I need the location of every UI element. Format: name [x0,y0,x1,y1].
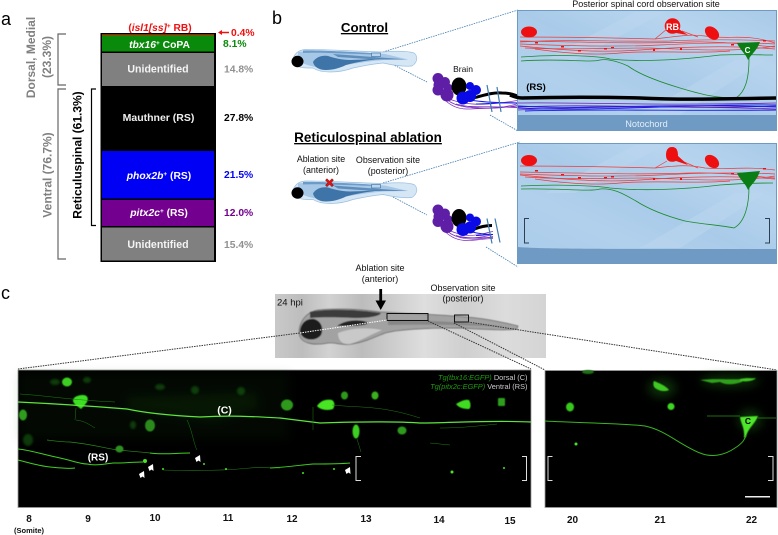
empty-axon brackets [524,218,770,243]
panel label a: a [1,9,12,29]
label: brain: Brain [453,64,473,74]
bracket: reticulospinal: Reticuluspinal (61.3%) [70,91,84,219]
photo: 24 hpi larva: 24 hpi [277,298,303,308]
zoom lines: panel b [383,10,520,267]
somite numbers: 12 [286,514,298,525]
panel label b: b [272,8,282,28]
micrograph: left, somites 8-15 [18,370,531,508]
neuron somata [19,378,505,452]
somite numbers: (Somite) [14,526,45,535]
panel label c: c [1,283,10,303]
label: ablation site in schematic [297,154,345,175]
diffuse background glow [18,372,290,440]
micrograph: left, somites 8-15: (RS) [88,452,108,464]
arrow: ablation site [376,289,386,310]
label: ablation site in schematic: Ablation site [297,154,345,164]
somite numbers: 9 [85,514,91,525]
segment: unidentified dorsal [102,53,214,86]
scale bar [745,496,770,498]
segment: tbx16 CoPA: CoPA [160,40,190,51]
Rohon-Beard neurons: RB [666,22,679,32]
bar title: isl1 RB: + [167,23,171,30]
zoom lines: panel c [18,320,777,370]
somite numbers: 11 [223,513,234,524]
segment: Mauthner [102,86,214,150]
axons [18,394,531,471]
bar outline [100,33,216,262]
percent labels: 0.4% [231,28,254,39]
legend: transgenic lines [430,373,528,391]
somite numbers: 8 [26,514,32,525]
notochord [518,115,776,130]
neuron somata [566,370,758,438]
puncta [574,442,578,446]
percent labels: 21.5% [224,170,253,181]
arrowheads [139,455,350,478]
segment: pitx2c [102,200,214,226]
diffuse glows [648,375,762,430]
percent labels: 15.4% [224,240,253,251]
segment: tbx16 CoPA [102,35,214,52]
brackets [548,456,773,480]
observation boxes [387,314,468,322]
somite numbers: 14 [433,515,445,526]
micrograph: right, somites 20-22 [545,370,777,508]
segment: phox2b: + [163,171,167,178]
segment: pitx2c: + [160,208,164,215]
Rohon-Beard neurons [520,18,775,54]
percent labels [223,28,254,251]
icon: red ablation cross [326,179,334,187]
CoPA neuron: C [745,46,751,55]
segment: phox2b: (RS) [167,171,191,182]
bracket: reticulospinal [70,89,96,226]
panel: ablated spinal cord [518,144,776,264]
segment: phox2b: phox2b [126,171,163,182]
segment: isl1 RB [102,34,214,35]
percent labels: 8.1% [223,39,246,50]
heading: reticulospinal ablation: Reticulospinal ablation [294,130,442,145]
diagram: ablated brain [432,204,500,244]
panel: control spinal cord [510,10,776,130]
axon labels: (C) [217,404,232,416]
label: ablation site in schematic: (anterior) [303,165,339,175]
puncta [143,459,505,474]
icon: control larval fish [292,49,417,72]
percent labels: 27.8% [224,113,253,124]
arrow: 0.4 percent [218,30,229,35]
icon: ablation larval fish [292,179,417,204]
bracket: dorsal medial [24,17,66,98]
percent labels: 14.8% [224,64,253,76]
larva body [299,309,518,345]
segment: Mauthner: Mauthner (RS) [123,112,194,124]
segment: phox2b [102,151,214,198]
segment: tbx16 CoPA: tbx16 [129,40,156,51]
label: observation site on photo: (posterior) [442,294,484,304]
label: observation site in schematic [356,155,420,176]
label: observation site on photo: Observation site [430,283,496,293]
bracket: ventral: Ventral (76.7%) [40,132,54,218]
label: observation site on photo [430,283,496,304]
label: ablation site on photo: Ablation site [355,263,405,273]
panel a: stacked bar of spinal neurons [100,33,216,262]
segment: pitx2c: pitx2c [129,208,160,219]
somite numbers: 13 [360,514,372,525]
diagram: control brain [432,73,520,112]
Rohon-Beard neurons [520,147,775,184]
somite numbers: 22 [746,515,757,526]
segment: unidentified dorsal: Unidentified [127,64,189,76]
CoPA axon [545,416,776,455]
CoPA neuron [521,171,773,228]
reticulospinal axons: (RS) [526,82,546,93]
bracket: dorsal medial: Dorsal, Medial [24,17,38,98]
brackets [356,456,526,480]
label: observation site in schematic: Observation site [356,155,420,165]
label: observation site in schematic: (posterior) [368,166,408,176]
heading: control: Control [341,20,388,35]
segment: tbx16 CoPA: + [156,40,160,47]
legend: transgenic lines: Tg(pitx2c:EGFP) Ventral (RS) [430,382,528,391]
notochord: Notochord [625,119,668,129]
photo: 24 hpi larva [275,294,546,358]
somite numbers: 10 [149,513,161,524]
bar title: isl1 RB: (isl1[ss] [128,23,167,34]
notochord [518,247,776,264]
percent labels: 12.0% [224,208,253,219]
reticulospinal axons [510,82,776,111]
bar title: isl1 RB: RB) [171,23,192,34]
somite numbers: 15 [504,516,516,527]
bracket: ventral [40,89,66,259]
segment: unidentified ventral: Unidentified [127,239,189,251]
legend: transgenic lines: Tg(tbx16:EGFP) Dorsal (C) [438,373,528,382]
neuron label: C [745,416,751,426]
segment: unidentified ventral [102,228,214,260]
label: ablation site on photo [355,263,405,284]
CoPA neuron [521,42,773,98]
label: ablation site on photo: (anterior) [362,274,398,284]
somite numbers: 21 [654,515,666,526]
segment: pitx2c: (RS) [164,208,188,219]
somite numbers: 20 [567,515,578,526]
somite numbers [14,513,757,535]
bracket: dorsal medial: (23.3%) [40,36,54,78]
